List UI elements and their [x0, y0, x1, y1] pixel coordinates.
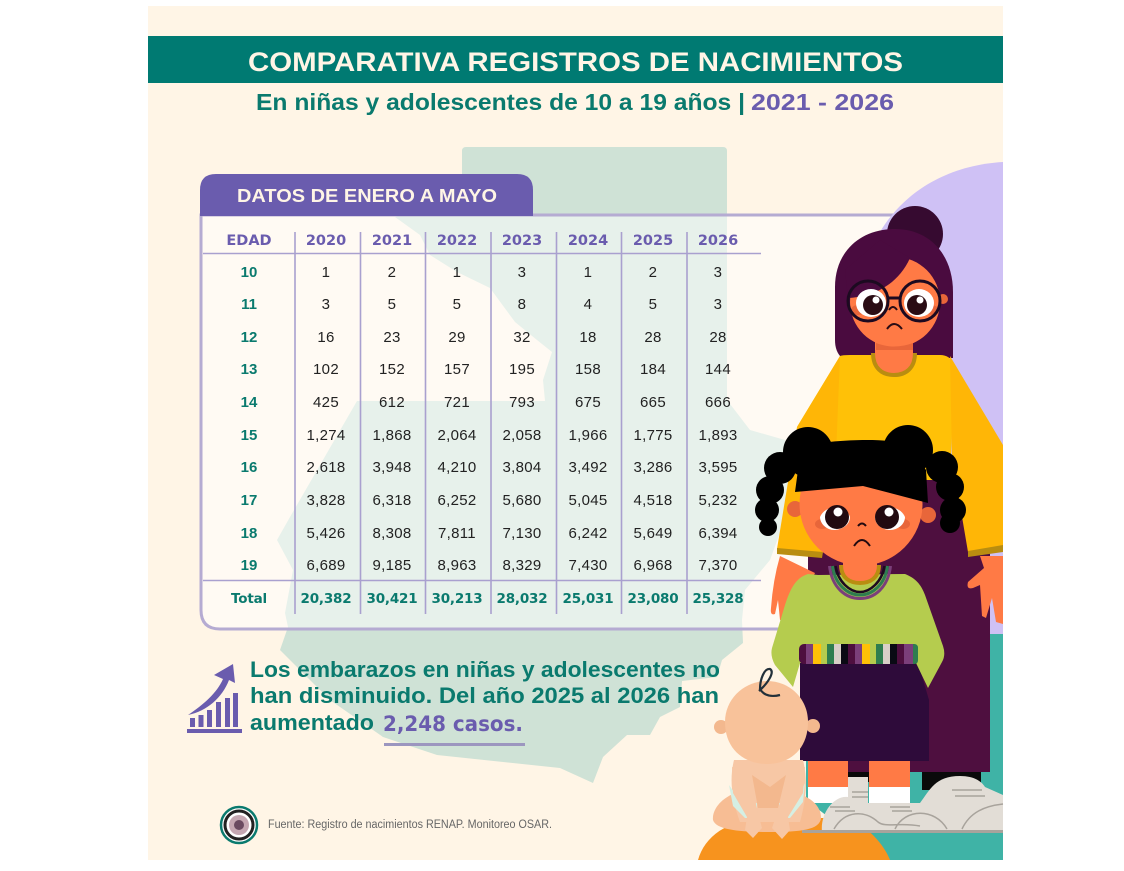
callout text: 2,248 casos. [383, 712, 523, 736]
table values: 675 [575, 394, 601, 411]
table values: 5,232 [698, 492, 738, 509]
age column: 10 [241, 264, 257, 281]
table values: 2,618 [306, 459, 346, 476]
age column: 18 [241, 525, 257, 542]
table values: 5,680 [502, 492, 542, 509]
table header row: EDAD [226, 233, 272, 249]
total row: 28,032 [497, 591, 547, 607]
poster background [148, 6, 1003, 860]
age column: 12 [241, 329, 257, 346]
table values: 3 [714, 264, 722, 281]
illustration: mother [771, 206, 1003, 790]
age column: 16 [241, 459, 257, 476]
table values: 3,595 [698, 459, 738, 476]
table values: 3,492 [568, 459, 608, 476]
table values: 666 [705, 394, 731, 411]
table values: 1 [453, 264, 461, 281]
table header row: 2025 [633, 233, 673, 249]
icon: OSAR logo [221, 807, 257, 843]
mother ear [938, 294, 948, 304]
table values: 3 [714, 296, 722, 313]
table values: 2 [388, 264, 396, 281]
table values: 3,804 [502, 459, 542, 476]
table values: 4 [584, 296, 592, 313]
mother feet [922, 772, 981, 790]
girl hair buns and braids [755, 425, 966, 536]
callout text: han disminuido. Del año 2025 al 2026 han [250, 683, 719, 708]
baby legs [713, 793, 821, 832]
lilac background shape [880, 162, 1003, 640]
girl hair top [795, 440, 928, 503]
table values: 195 [509, 361, 535, 378]
table values: 9,185 [372, 557, 412, 574]
table values: 5,045 [568, 492, 608, 509]
baby head [725, 681, 808, 764]
table values: 23 [383, 329, 401, 346]
table values: 6,394 [698, 525, 738, 542]
table values: 7,370 [698, 557, 738, 574]
table values: 2,058 [502, 427, 542, 444]
total row: Total [231, 591, 267, 607]
table values: 1,966 [568, 427, 608, 444]
baby curl [759, 669, 780, 696]
table values: 5 [453, 296, 461, 313]
table values: 4,210 [437, 459, 477, 476]
baby diaper [729, 783, 805, 818]
table values: 6,318 [372, 492, 412, 509]
table values: 1,775 [633, 427, 673, 444]
mother bun [887, 206, 943, 262]
source note: Fuente: Registro de nacimientos RENAP. Monitoreo OSAR. [268, 819, 552, 831]
table values: 1,274 [306, 427, 346, 444]
table values: 157 [444, 361, 470, 378]
table values: 8,963 [437, 557, 477, 574]
mother neck [875, 335, 913, 374]
mother right hand [968, 556, 1003, 624]
mother eyes [851, 289, 938, 317]
table values: 8,308 [372, 525, 412, 542]
girl face [800, 442, 922, 566]
table values: 1,893 [698, 427, 738, 444]
table values: 102 [313, 361, 339, 378]
table values: 184 [640, 361, 666, 378]
table values: 6,242 [568, 525, 608, 542]
girl eyes [815, 505, 910, 530]
age column: 13 [241, 361, 257, 378]
title banner [148, 36, 1003, 83]
girl neck [843, 555, 877, 583]
teal background shape [806, 634, 1003, 860]
table values: 8 [518, 296, 526, 313]
table values: 5 [649, 296, 657, 313]
table values: 6,968 [633, 557, 673, 574]
callout text: Los embarazos en niñas y adolescentes no [250, 657, 720, 682]
table values: 18 [579, 329, 597, 346]
mother mouth [887, 307, 902, 329]
panel: data table [200, 174, 1000, 629]
table values: 29 [448, 329, 466, 346]
mother face [850, 257, 940, 347]
illustration: girl [755, 425, 966, 803]
table values: 28 [709, 329, 727, 346]
total row: 23,080 [628, 591, 678, 607]
illustration: shoes [802, 776, 1003, 833]
table header row: 2022 [437, 233, 477, 249]
table values: 2,064 [437, 427, 477, 444]
table tab heading [200, 174, 533, 216]
table values: 425 [313, 394, 339, 411]
table values: 3 [322, 296, 330, 313]
mother glasses [848, 281, 940, 321]
girl legs [808, 758, 910, 803]
table header row [226, 233, 738, 249]
mother fringe [845, 240, 910, 298]
mother hair [835, 229, 953, 358]
total row [231, 591, 743, 607]
table values: 7,130 [502, 525, 542, 542]
map of Guatemala [277, 147, 792, 783]
table values: 5,649 [633, 525, 673, 542]
table header row: 2024 [568, 233, 608, 249]
age column: 19 [241, 557, 257, 574]
table values: 32 [513, 329, 531, 346]
table values: 1 [322, 264, 330, 281]
table header row: 2020 [306, 233, 346, 249]
mother cuffs [777, 545, 1003, 558]
table values: 5,426 [306, 525, 346, 542]
table card [201, 215, 1000, 629]
total row: 25,328 [693, 591, 743, 607]
table values: 612 [379, 394, 405, 411]
table values: 28 [644, 329, 662, 346]
callout text [250, 657, 720, 746]
table values: 152 [379, 361, 405, 378]
mother left hand [771, 556, 815, 625]
total row: 30,213 [432, 591, 482, 607]
mother skirt [808, 470, 990, 772]
girl sweater [771, 574, 944, 688]
table values: 3,828 [306, 492, 346, 509]
table values: 4,518 [633, 492, 673, 509]
table header row: 2021 [372, 233, 412, 249]
table values: 7,811 [438, 525, 476, 542]
table values: 144 [705, 361, 731, 378]
age column: 14 [241, 394, 258, 411]
table values: 3,948 [372, 459, 412, 476]
age column: 15 [241, 427, 257, 444]
subtitle: En niñas y adolescentes de 10 a 19 años | [256, 89, 745, 115]
girl woven belt [799, 644, 918, 664]
subtitle: 2021 - 2026 [751, 89, 894, 115]
table values [306, 264, 738, 574]
girl ears [787, 501, 803, 517]
girl mouth [854, 524, 870, 546]
orange background mound [698, 818, 890, 860]
table values: 16 [317, 329, 335, 346]
table header row: 2023 [502, 233, 542, 249]
baby body [732, 760, 806, 822]
girl collar [830, 566, 890, 598]
total row: 30,421 [367, 591, 417, 607]
total row: 25,031 [563, 591, 613, 607]
mother sweater [797, 355, 955, 480]
age column: 17 [241, 492, 257, 509]
table values: 8,329 [502, 557, 542, 574]
table values: 721 [444, 394, 470, 411]
table values: 3 [518, 264, 526, 281]
table values: 1 [584, 264, 592, 281]
illustration: baby [713, 669, 821, 839]
table values: 2 [649, 264, 657, 281]
table values: 158 [575, 361, 601, 378]
table values: 793 [509, 394, 535, 411]
total row: 20,382 [301, 591, 351, 607]
callout text: aumentado [250, 710, 374, 735]
baby ears [714, 720, 728, 734]
table values: 1,868 [372, 427, 412, 444]
girl skirt [800, 663, 929, 761]
age column [241, 264, 258, 574]
title banner: COMPARATIVA REGISTROS DE NACIMIENTOS [248, 47, 903, 77]
icon: rising bar chart with arrow [187, 664, 242, 733]
table values: 5 [388, 296, 396, 313]
table header row: 2026 [698, 233, 738, 249]
table values: 6,689 [306, 557, 346, 574]
table values: 7,430 [568, 557, 608, 574]
table values: 6,252 [437, 492, 477, 509]
age column: 11 [241, 296, 257, 313]
baby arms [732, 767, 762, 838]
table values: 665 [640, 394, 666, 411]
table values: 3,286 [633, 459, 673, 476]
table tab heading: DATOS DE ENERO A MAYO [237, 185, 497, 206]
